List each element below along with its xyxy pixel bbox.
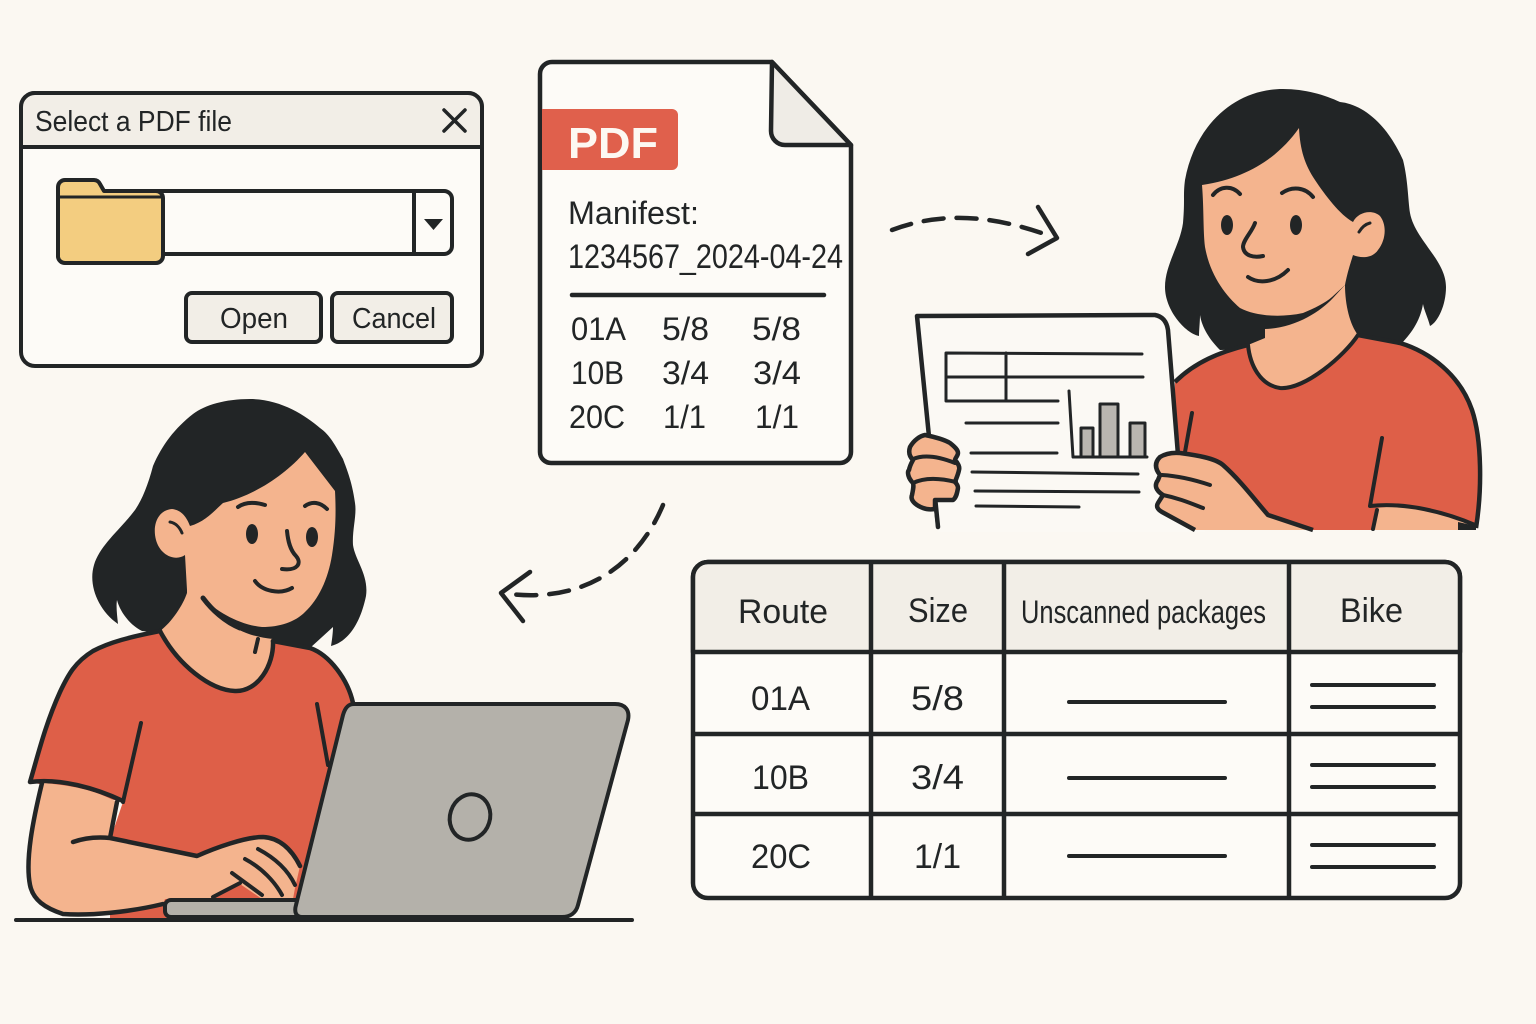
- manifest number: 1234567_2024-04-24: [568, 238, 843, 276]
- manifest rows: [569, 311, 801, 435]
- document page: [540, 62, 851, 463]
- table rows: 20C: [751, 838, 811, 876]
- laptop screen: [295, 704, 628, 917]
- forearm: [1373, 507, 1475, 530]
- sleeve detail: [123, 704, 328, 802]
- hair: [1165, 89, 1446, 350]
- arm: [28, 783, 300, 915]
- neck: [160, 570, 273, 691]
- shirt: [1170, 335, 1480, 530]
- sleeve corner: [1458, 522, 1476, 530]
- report sheet: [917, 315, 1205, 532]
- eyebrows: [238, 503, 327, 509]
- neck tick: [255, 639, 258, 652]
- table blank entry lines: [1069, 685, 1434, 867]
- shirt patch under wrist: [213, 884, 262, 899]
- mouth: [1248, 270, 1288, 281]
- dialog title bar: [21, 93, 482, 147]
- heading rule: [572, 293, 824, 297]
- eyebrows: [1213, 188, 1313, 197]
- illustration: woman using laptop: [16, 399, 632, 920]
- report bar chart: [1069, 391, 1147, 457]
- cancel button: [332, 293, 452, 342]
- panel: file select dialog: [21, 93, 482, 366]
- page fold: [771, 62, 851, 145]
- manifest rows: 5/8: [662, 311, 709, 347]
- right hand and arm: [1156, 453, 1313, 530]
- table rows: 10B: [752, 759, 809, 797]
- panel: PDF manifest document: [540, 62, 851, 463]
- arm outline: [28, 783, 300, 915]
- manifest rows: 10B: [571, 355, 624, 391]
- file input: [100, 191, 452, 254]
- collar neckline: [1248, 335, 1358, 388]
- sleeve detail: [1370, 438, 1475, 529]
- nose: [1243, 223, 1263, 257]
- jaw tip: [203, 598, 240, 628]
- manifest rows: 1/1: [755, 399, 799, 435]
- manifest rows: 3/4: [753, 355, 801, 391]
- icon: dropdown arrow: [424, 219, 443, 230]
- face: [1202, 128, 1385, 316]
- ear detail: [170, 522, 182, 533]
- shirt outline: [30, 631, 353, 801]
- table rows: [751, 680, 964, 876]
- table rows: 1/1: [914, 838, 961, 876]
- PDF badge: [542, 109, 678, 170]
- icon: close: [444, 110, 465, 131]
- face: [155, 452, 336, 627]
- cancel button: Cancel: [352, 303, 436, 335]
- manifest rows: 01A: [571, 311, 627, 347]
- report table lines: [946, 353, 1143, 507]
- table rows: 3/4: [911, 759, 964, 797]
- left hand: [908, 435, 959, 509]
- manifest rows: 1/1: [663, 399, 706, 435]
- laptop base: [165, 900, 305, 917]
- table frame: [693, 562, 1460, 898]
- open button: Open: [220, 303, 288, 335]
- illustration: woman reading report: [908, 89, 1480, 532]
- table rows: 01A: [751, 680, 810, 718]
- table header labels: [738, 592, 1403, 631]
- neck: [1248, 285, 1358, 388]
- desk line: [16, 918, 632, 922]
- open button: [186, 293, 321, 342]
- folder tab line: [58, 196, 163, 198]
- right fingers: [1162, 475, 1210, 508]
- dialog window: [21, 93, 482, 366]
- manifest heading: Manifest:: [568, 195, 699, 231]
- manifest rows: 5/8: [752, 311, 801, 347]
- left sheet tail: [935, 500, 938, 527]
- neckline: [160, 631, 273, 691]
- mouth: [255, 581, 292, 592]
- shirt: [30, 631, 353, 918]
- crease by hand: [1185, 413, 1192, 452]
- laptop logo: [444, 789, 496, 845]
- table header labels: Bike: [1340, 592, 1403, 630]
- table grid: [693, 562, 1460, 898]
- arrow: document to laptop user: [501, 505, 663, 621]
- sheet outline: [917, 315, 1178, 527]
- table header labels: Size: [908, 592, 968, 630]
- table header labels: Route: [738, 593, 828, 631]
- ear detail: [1359, 223, 1370, 232]
- table header labels: Unscanned packages: [1021, 594, 1266, 630]
- panel: route table: [693, 562, 1460, 898]
- arrow: document to reader: [892, 207, 1057, 254]
- manifest rows: 3/4: [662, 355, 709, 391]
- icon: folder: [58, 180, 163, 263]
- left fingers: [913, 456, 956, 483]
- table header: [693, 562, 1460, 652]
- dropdown divider: [412, 191, 416, 254]
- manifest rows: 20C: [569, 399, 625, 435]
- hair: [92, 399, 366, 648]
- eyes: [1221, 215, 1302, 235]
- dialog title: Select a PDF file: [35, 106, 232, 138]
- eyes: [246, 524, 318, 547]
- table rows: 5/8: [911, 680, 964, 718]
- fingers: [213, 849, 295, 897]
- PDF badge: PDF: [568, 119, 658, 168]
- shirt outline: [1175, 335, 1480, 528]
- nose: [282, 531, 299, 569]
